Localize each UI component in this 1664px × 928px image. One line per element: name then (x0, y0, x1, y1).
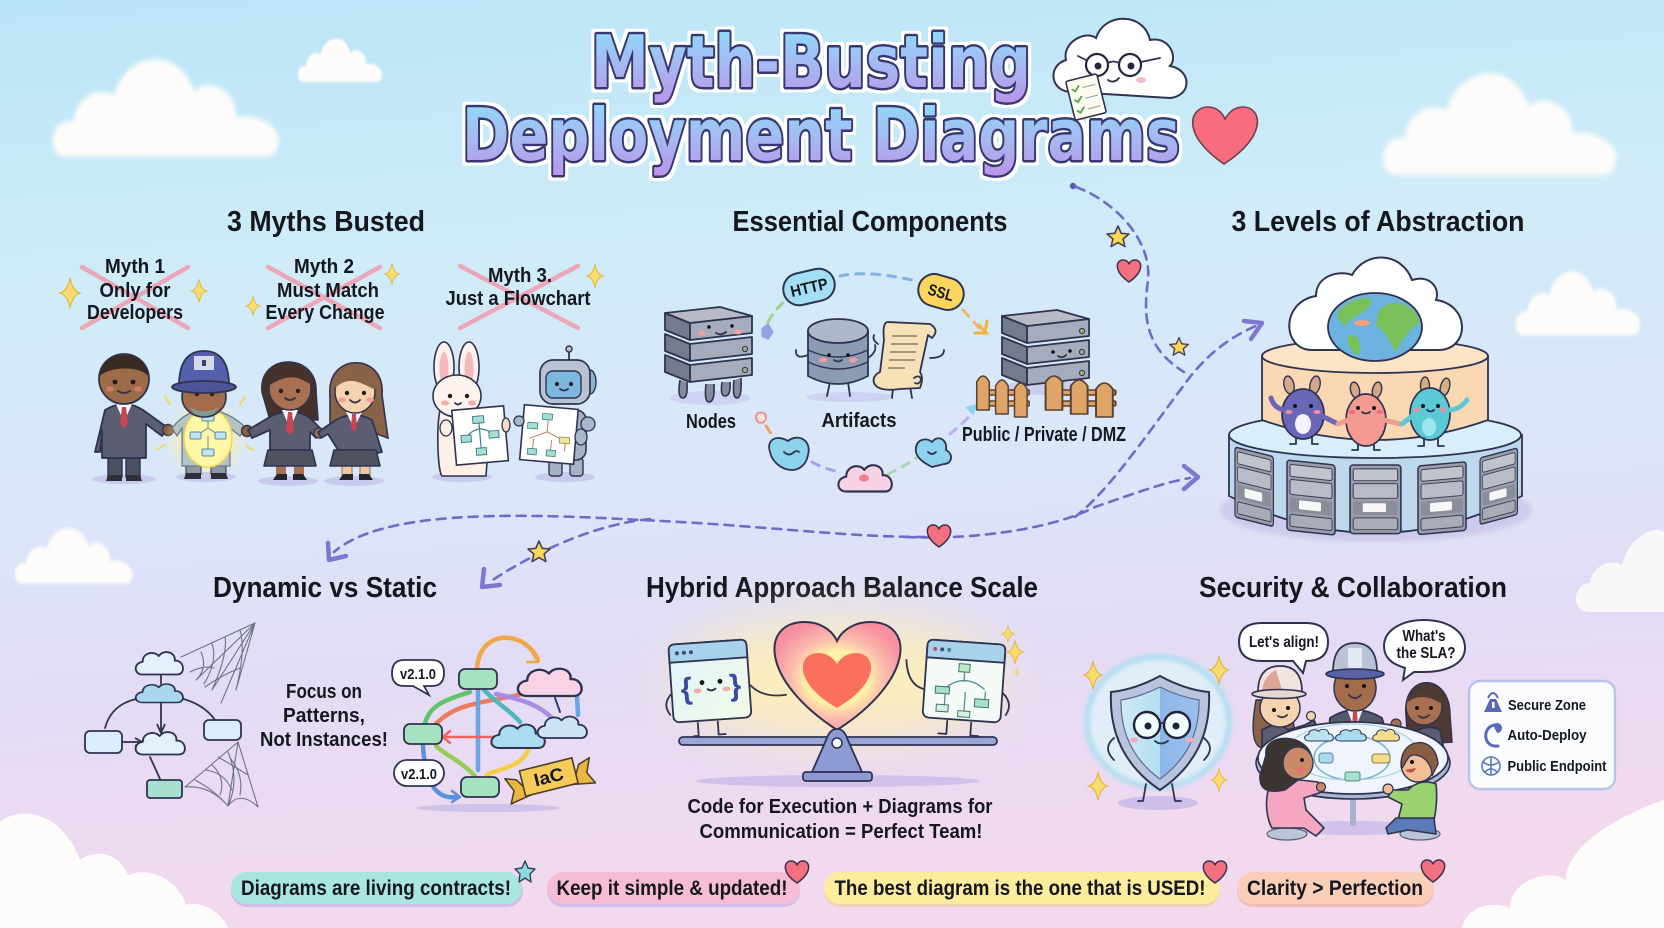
heading: Essential Components (732, 206, 1008, 238)
level 2: peach platform tier (1262, 339, 1488, 440)
speech bubble: let's align (1239, 623, 1328, 673)
SSL pill: SSL (926, 282, 956, 305)
dashed connector arrows (328, 183, 1262, 587)
pill: keep it simple: Keep it simple & updated! (556, 877, 788, 900)
level 2 mascots holding hands (1271, 375, 1467, 450)
front row boy in green (1383, 743, 1440, 840)
version tag: v2.1.0 (401, 766, 437, 783)
icon: auto-deploy (1486, 723, 1502, 746)
myth 3 label (446, 264, 603, 328)
IaC ribbon (504, 754, 596, 804)
table diagram (1287, 724, 1417, 781)
focus text: Not Instances! (260, 729, 388, 751)
myth 1 label (60, 256, 207, 328)
myth 2 label: Must Match (277, 280, 379, 302)
characters: robot with complex diagram (514, 346, 596, 482)
speech bubble: let's align: Let's align! (1249, 634, 1319, 651)
myth 2 label: Every Change (266, 302, 384, 324)
focus text: Focus on (286, 681, 362, 703)
icon: cloud mascot with glasses and checklist (1053, 19, 1186, 120)
label: nodes: Nodes (686, 411, 736, 433)
characters: rabbit with simple flowchart (432, 342, 510, 482)
icon: public endpoint (1482, 757, 1500, 775)
myth 1 label: Developers (87, 302, 183, 324)
speech bubble: what's the SLA (1384, 620, 1465, 680)
legend item: Public Endpoint (1508, 758, 1607, 775)
focus text: Patterns, (283, 705, 365, 727)
heading: Dynamic vs Static (213, 572, 437, 604)
SSL pill (914, 270, 968, 314)
heart on scale (774, 622, 900, 730)
myth 3 label: Just a Flowchart (446, 288, 591, 310)
diagram window character (901, 638, 1013, 738)
heading: Security & Collaboration (1199, 572, 1507, 604)
myth 2 label (246, 256, 399, 328)
back row people (1252, 643, 1452, 770)
characters: woman in suit (248, 362, 324, 486)
title: Deployment Diagrams (462, 93, 1180, 177)
caption: Communication = Perfect Team! (700, 821, 982, 843)
IaC ribbon: IaC (532, 764, 566, 790)
myth 3 label: Myth 3. (488, 265, 552, 287)
pill: best diagram: The best diagram is the one that is USED! (834, 877, 1206, 900)
pill: living contracts: Diagrams are living contracts! (241, 877, 511, 900)
label: public private dmz: Public / Private / DMZ (962, 424, 1126, 446)
myth 1 label: Only for (100, 280, 171, 302)
fulcrum (803, 729, 872, 781)
label: artifacts: Artifacts (822, 410, 896, 432)
sparkles (1002, 626, 1023, 676)
small cloud mascots (769, 438, 951, 492)
level 3: cloud with globe (1289, 258, 1462, 361)
level 1: infrastructure server ring (1220, 412, 1532, 542)
heading: 3 Myths Busted (227, 206, 425, 238)
legend item: Secure Zone (1508, 697, 1586, 714)
front row girl in pink (1260, 738, 1326, 840)
caption (688, 796, 993, 843)
pill: keep it simple (547, 861, 809, 907)
legend (1469, 681, 1615, 789)
balance beam and fulcrum (679, 737, 997, 787)
icon: secure zone (1484, 693, 1502, 712)
characters: second woman in suit (318, 363, 388, 486)
pill: clarity over perfection (1237, 860, 1445, 907)
artifact scroll (874, 322, 944, 398)
code window character: { (679, 672, 694, 706)
myth 1 label: Myth 1 (105, 256, 165, 278)
panel: security and collaboration (1084, 572, 1615, 840)
server with fence zones (977, 310, 1116, 417)
panel: essential components (665, 206, 1126, 492)
characters: glowing hard-hat worker with flowchart (158, 351, 253, 482)
myth 2 label: Myth 2 (294, 256, 354, 278)
HTTP pill: HTTP (789, 276, 830, 301)
code window character (662, 637, 789, 738)
caption: Code for Execution + Diagrams for (688, 796, 993, 818)
pill: best diagram (824, 861, 1227, 907)
heading: 3 Levels of Abstraction (1232, 206, 1524, 238)
warm glow (673, 620, 1003, 740)
characters: man in suit (92, 354, 174, 484)
heading: Hybrid Approach Balance Scale (646, 572, 1038, 604)
icon: title heart (1193, 107, 1257, 164)
code window character: } (728, 669, 743, 703)
title (462, 20, 1180, 177)
panel: dynamic vs static (85, 572, 596, 812)
pill: clarity over perfection: Clarity > Perfection (1247, 877, 1423, 900)
panel: 3 levels of abstraction (1220, 206, 1532, 542)
speech bubble: what's the SLA: What's (1402, 628, 1446, 645)
icon: connector star and heart decorations (528, 226, 1188, 562)
artifact database cylinder (796, 319, 894, 402)
focus text (260, 681, 388, 751)
coloured protocol link ring (756, 274, 987, 474)
speech bubble: what's the SLA: the SLA? (1396, 645, 1456, 662)
HTTP pill (780, 266, 838, 308)
panel: hybrid approach balance scale (646, 572, 1038, 843)
static diagram covered in cobwebs (85, 623, 258, 807)
pill: living contracts (231, 861, 535, 907)
version speech bubble (392, 660, 444, 695)
sparkles (1084, 656, 1228, 800)
legend item: Auto-Deploy (1508, 727, 1587, 744)
takeaway pills (231, 860, 1445, 907)
panel: 3 myths busted (60, 206, 603, 486)
dynamic colourful diagram (392, 638, 596, 812)
version tag (394, 760, 444, 786)
shield mascot (1087, 657, 1229, 810)
team round table (1252, 643, 1452, 840)
version speech bubble: v2.1.0 (400, 666, 436, 683)
title: Myth-Busting (591, 20, 1031, 104)
node server stack (665, 307, 752, 405)
